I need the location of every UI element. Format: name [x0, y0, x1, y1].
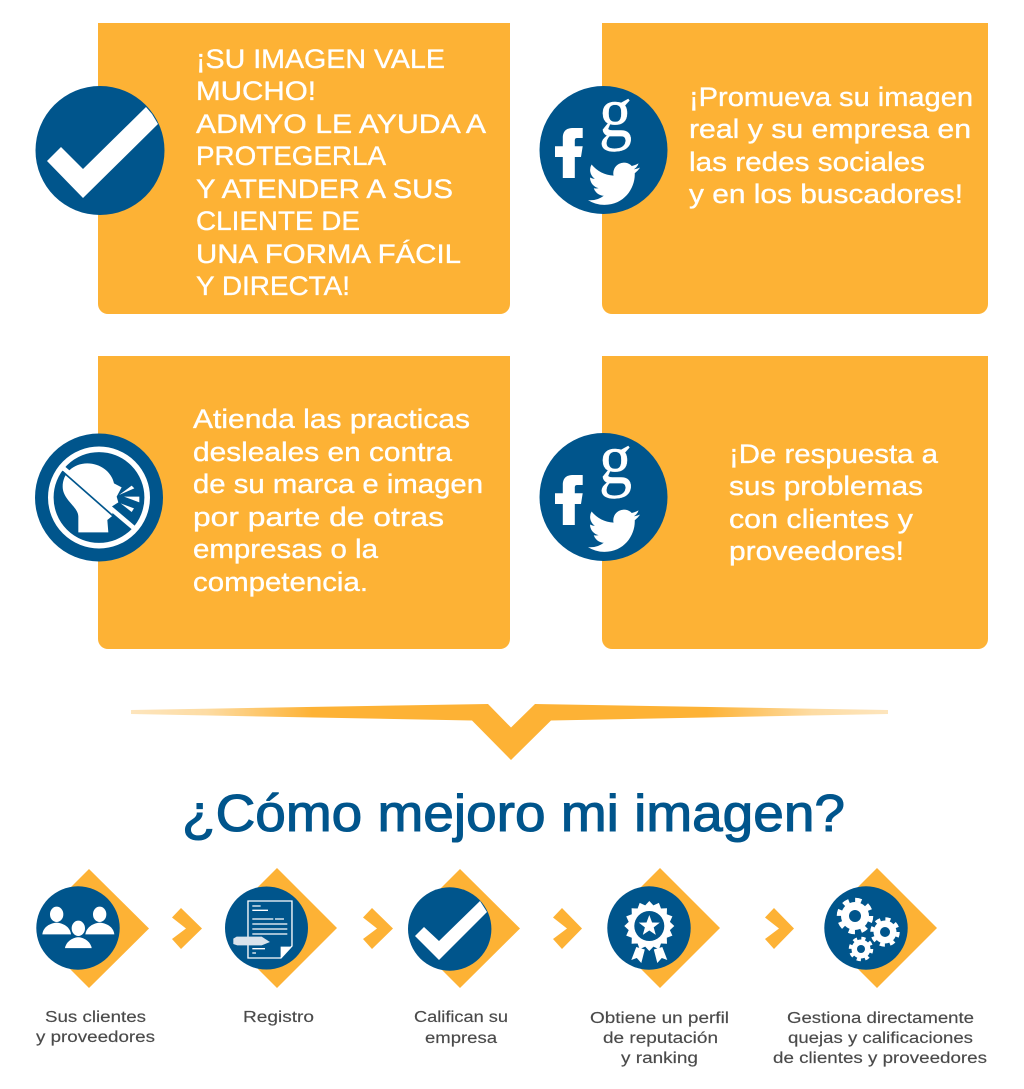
panel: practicas desleales — [98, 356, 510, 649]
label: sus clientes — [36, 1009, 155, 1046]
icon: social networks circle — [540, 419, 668, 561]
step 1: sus clientes — [36, 869, 149, 988]
icon: gears — [839, 900, 898, 960]
panel: de respuesta — [602, 356, 988, 649]
text: su imagen vale mucho: Y DIRECTA! — [196, 271, 350, 301]
text: de respuesta: sus problemas — [729, 471, 923, 501]
text: practicas desleales — [193, 404, 483, 597]
label: califican su empresa: Califican su — [414, 1009, 508, 1026]
label: obtiene un perfil: y ranking — [621, 1050, 698, 1067]
chevron — [363, 908, 393, 949]
icon: award rosette — [624, 901, 674, 963]
label: obtiene un perfil: de reputación — [603, 1030, 718, 1047]
icon: people — [42, 907, 114, 949]
label: registro: Registro — [243, 1009, 314, 1026]
text: su imagen vale mucho: CLIENTE DE — [196, 206, 360, 236]
text: promueva su imagen: y en los buscadores! — [689, 179, 963, 209]
chevron — [172, 908, 202, 949]
chevron — [765, 908, 794, 949]
label: califican su empresa: empresa — [425, 1030, 497, 1047]
text: de respuesta: ¡De respuesta a — [729, 439, 939, 469]
chevron — [553, 908, 582, 949]
label: gestiona directamente: quejas y calificaciones — [788, 1030, 973, 1047]
text: su imagen vale mucho: Y ATENDER A SUS — [196, 174, 453, 204]
icon: check mark — [415, 901, 487, 960]
text: practicas desleales: empresas o la — [193, 534, 379, 564]
step 3: califican — [408, 869, 520, 988]
panel: su imagen vale mucho — [98, 23, 510, 314]
step 5: gestiona — [824, 868, 937, 988]
icon: social networks circle: g — [599, 419, 632, 499]
text: promueva su imagen: las redes sociales — [689, 147, 925, 177]
text: practicas desleales: de su marca e imagen — [193, 469, 483, 499]
label: gestiona directamente — [773, 1010, 987, 1067]
icon: social networks circle — [540, 72, 668, 214]
icon: document and pen — [233, 901, 292, 958]
icon: social networks circle: g — [599, 72, 632, 152]
label: gestiona directamente: de clientes y proveedores — [773, 1050, 987, 1067]
text: practicas desleales: competencia. — [193, 567, 368, 597]
text: practicas desleales: Atienda las practicas — [193, 404, 470, 434]
step 2: registro — [225, 868, 337, 988]
title: ¿Cómo mejoro mi imagen? — [182, 785, 845, 843]
text: promueva su imagen: real y su empresa en — [689, 114, 971, 144]
text: su imagen vale mucho: UNA FORMA FÁCIL — [196, 239, 461, 269]
label: sus clientes: y proveedores — [36, 1029, 155, 1046]
step 4: perfil — [607, 868, 720, 988]
text: de respuesta: proveedores! — [729, 536, 904, 566]
text: de respuesta — [729, 439, 939, 566]
text: su imagen vale mucho: ADMYO LE AYUDA A — [196, 109, 486, 139]
label: sus clientes: Sus clientes — [45, 1009, 146, 1026]
text: de respuesta: con clientes y — [729, 504, 914, 534]
text: practicas desleales: por parte de otras — [193, 502, 444, 532]
text: su imagen vale mucho: PROTEGERLA — [196, 141, 386, 171]
label: gestiona directamente: Gestiona directamente — [787, 1010, 974, 1027]
label: obtiene un perfil: Obtiene un perfil — [590, 1010, 729, 1027]
icon: no speaking circle — [35, 434, 163, 562]
text: practicas desleales: desleales en contra — [193, 437, 453, 467]
icon: check mark circle — [36, 86, 164, 215]
text: su imagen vale mucho — [196, 44, 486, 301]
label: califican su empresa — [414, 1009, 508, 1047]
arrow: divider pointing down — [131, 704, 888, 760]
text: promueva su imagen: ¡Promueva su imagen — [689, 82, 973, 112]
panel: promueva su imagen — [602, 23, 988, 314]
label: obtiene un perfil — [590, 1010, 729, 1067]
text: su imagen vale mucho: ¡SU IMAGEN VALE — [196, 44, 445, 74]
text: promueva su imagen — [689, 82, 973, 209]
text: su imagen vale mucho: MUCHO! — [196, 76, 316, 106]
